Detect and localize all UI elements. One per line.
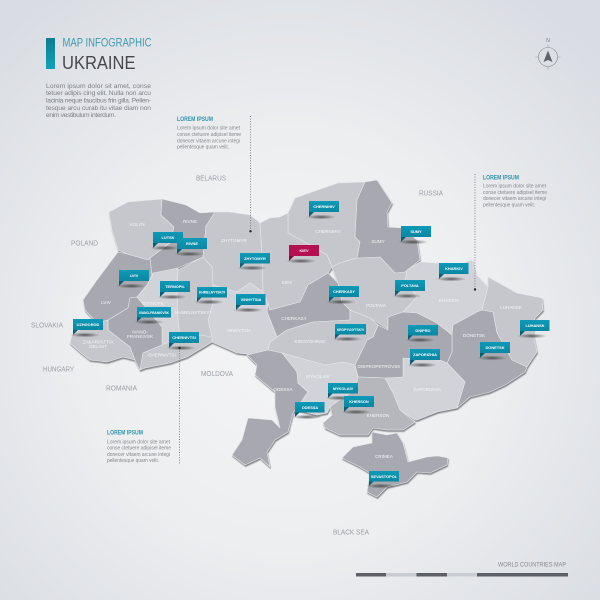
footer scale bar [356, 573, 568, 576]
region: Cherkasy [267, 273, 350, 337]
region names: CRIMEA [375, 454, 394, 459]
city pin: Uzhgorod [70, 319, 103, 337]
region: Zaporizhia [385, 358, 465, 420]
region: Zakarpattia [70, 320, 135, 362]
city pin: Poltava [392, 280, 425, 298]
region names: CHERKASY [281, 316, 307, 321]
region names: KIEV [282, 280, 293, 285]
city pin: Rivne: RIVNE [186, 241, 198, 246]
city pin: Ternopil [157, 281, 190, 299]
city pin: Zhytomyr: ZHYTOMYR [244, 256, 266, 261]
callout: right Lorem Ipsum: Lorem ipsum dolor site amet [483, 184, 547, 190]
city pin: Odessa [292, 402, 324, 419]
country and sea labels: POLAND [71, 238, 98, 248]
city pin: Rivne [174, 238, 207, 256]
country and sea labels: RUSSIA [419, 188, 443, 198]
region: Mykolaiv [282, 353, 358, 415]
country and sea labels: BELARUS [196, 174, 226, 182]
region names [83, 219, 523, 459]
city pin: Kharkiv [436, 263, 468, 281]
region names: FRANKIVSK [127, 334, 154, 339]
region names: SUMY [371, 239, 385, 244]
city pin: Kharkiv: KHARKIV [445, 266, 463, 271]
map of Ukraine regions [70, 180, 543, 497]
city pin: Vinnytsia: VINNYTSIA [241, 297, 262, 302]
region: Crimea [342, 432, 448, 497]
city pin: Khmelnytskyi [194, 287, 227, 304]
callout: top Lorem Ipsum [177, 116, 252, 232]
region names: DONETSK [463, 333, 486, 338]
region names: MYKOLAIV [306, 374, 331, 379]
city pin: Chernihiv: CHERNIHIV [313, 204, 335, 209]
region names: RIVNE [183, 219, 197, 224]
city pin: Sumy: SUMY [410, 229, 422, 234]
city pin: Chernivtsi: CHERNIVTSI [172, 335, 196, 340]
region names: ODESSA [273, 387, 294, 392]
region names: TERNOPIL [142, 301, 165, 306]
city pin: Ivano-Frankivsk: IVANO-FRANKIVSK [139, 310, 169, 315]
region: Ternopil [137, 268, 180, 345]
city pin: Luhansk: LUHANSK [525, 323, 545, 328]
city pin: Uzhgorod: UZHGOROD [77, 322, 100, 327]
country and sea labels: ROMANIA [106, 384, 137, 392]
callout: bottom Lorem Ipsum: LOREM IPSUM [107, 430, 143, 436]
title: map infographic: MAP INFOGRAPHIC [62, 38, 152, 50]
region: Chernihiv [288, 182, 365, 267]
city pin: Ternopil: TERNOPIL [165, 284, 185, 289]
callout: right Lorem Ipsum: donecer vitaem arcune integi [483, 196, 546, 202]
city pin: Cherkasy: CHERKASY [333, 289, 355, 294]
region: Zhytomyr [203, 212, 263, 292]
header accent bar [46, 38, 55, 69]
country and sea labels: HUNGARY [43, 364, 74, 374]
region names: ZHYTOMYR [221, 238, 248, 243]
region: Khmelnytskyi [177, 257, 213, 337]
callout: bottom Lorem Ipsum: conse ctetuere adipisel iteme [107, 446, 171, 452]
city pin: Sevastopol: SEVASTOPOL [371, 474, 398, 479]
country and sea labels: BLACK SEA [333, 528, 369, 536]
region: Rivne [150, 199, 215, 277]
callout: top Lorem Ipsum: conse ctetuere adipisel iteme [177, 132, 241, 138]
city pin: Lutsk [150, 232, 183, 250]
region names: KHERSON [367, 413, 389, 418]
city pin: Zhytomyr [237, 253, 270, 270]
city pin: Kropyvnytskyi [332, 324, 366, 341]
region names: DNIPROPETROVSK [358, 364, 401, 369]
region names: CHERNIVTSI [148, 352, 176, 358]
city pin: Khmelnytskyi: KHMELNYTSKYI [199, 290, 225, 294]
city pin: Mykolaiv [325, 383, 358, 400]
intro paragraph: tetuer adipis cing elit. Nulla non arcu [46, 90, 151, 97]
region: Kherson [323, 377, 415, 435]
callout: top Lorem Ipsum: Lorem ipsum dolor site amet [177, 126, 241, 132]
region names: KHARKIV [439, 298, 460, 303]
region names: VOLYN [129, 222, 145, 227]
city pin: Zaporizhia [407, 349, 440, 367]
callout: bottom Lorem Ipsum: Lorem ipsum dolor site amet [107, 440, 171, 446]
region: Odessa [232, 350, 308, 467]
region names: ZAKARPATTIA [83, 340, 114, 344]
city pin: Dnipro [405, 325, 438, 342]
region: Poltava [332, 257, 417, 329]
city pin: Sumy [398, 226, 431, 244]
callout: top Lorem Ipsum: LOREM IPSUM [177, 117, 213, 123]
callout: top Lorem Ipsum: donecer vitaem arcune integi [177, 138, 240, 144]
city pin: Kherson: KHERSON [349, 399, 369, 404]
region: Ivano-Frankivsk [108, 297, 162, 370]
region names: LUHANSK [500, 305, 523, 310]
city pin: Luhansk [517, 320, 550, 338]
region: Vinnytsia [208, 283, 277, 355]
city pin: Mykolaiv: MYKOLAIV [333, 386, 354, 391]
title: Ukraine: UKRAINE [62, 52, 136, 73]
region: Volyn [109, 199, 174, 260]
callout: right Lorem Ipsum: pellentesque quam velit. [483, 202, 535, 208]
region names: CHERNIHIV [315, 229, 342, 234]
city pin: Zaporizhia: ZAPORIZHIA [413, 352, 437, 357]
city pin: Vinnytsia [233, 294, 266, 312]
callout: bottom Lorem Ipsum: donecer vitaem arcune integi [107, 452, 170, 458]
city pin: Ivano-Frankivsk [134, 307, 171, 324]
city pin: Poltava: POLTAVA [401, 283, 419, 288]
region names: POLTAVA [366, 303, 387, 308]
city pin: Cherkasy [326, 286, 359, 304]
region: Kirovohrad [268, 310, 378, 365]
city pin: Kropyvnytskyi: KROPYVNYTSKYI [337, 327, 364, 332]
footer label: WORLD COUNTRIES MAP [498, 562, 566, 568]
compass: N [546, 38, 550, 44]
region names: KIROVOHRAD [295, 339, 326, 344]
city pin: Kiev (capital): KIEV [299, 248, 309, 253]
city pin: Kiev (capital) [286, 245, 319, 263]
callout: top Lorem Ipsum: pellentesque quam velit. [177, 144, 229, 150]
callout: right Lorem Ipsum: conse ctetuere adipisel iteme [483, 190, 547, 196]
city pin: Donetsk: DONETSK [485, 345, 505, 350]
city pin: Odessa: ODESSA [302, 405, 318, 410]
city pin: Chernihiv [306, 201, 339, 219]
callout: bottom Lorem Ipsum [107, 347, 181, 464]
intro paragraph: tesque arcu curab itu vitae diam non [46, 105, 151, 112]
callout: bottom Lorem Ipsum: pellentesque quam velit. [107, 458, 159, 464]
country and sea labels: SLOVAKIA [31, 320, 63, 330]
country and sea labels [31, 174, 443, 536]
region names: VINNYTSIA [227, 328, 252, 333]
callout: right Lorem Ipsum: LOREM IPSUM [483, 176, 519, 182]
city pin: Dnipro: DNIPRO [415, 328, 431, 333]
region: Luhansk [482, 277, 543, 367]
city pin: Kherson [341, 396, 374, 414]
intro paragraph: Lorem ipsum dolor sit amet, conse [46, 83, 151, 90]
city pin: Lviv [116, 270, 149, 288]
intro paragraph: enim vestibulum interdum. [46, 112, 116, 119]
region: Dnipropetrovsk [355, 312, 452, 378]
city pin: Chernivtsi [166, 332, 199, 350]
city pin: Sevastopol [366, 471, 399, 488]
compass [536, 38, 560, 70]
region: Lviv [83, 252, 153, 323]
region: Kiev [260, 213, 332, 310]
region: Kharkiv [403, 260, 488, 335]
city pin: Lviv: LVIV [130, 273, 139, 278]
intro paragraph [46, 83, 151, 119]
callout: right Lorem Ipsum [474, 174, 547, 291]
city pin: Lutsk: LUTSK [162, 235, 175, 240]
region names: ZAPORIZHIA [413, 387, 442, 392]
country and sea labels: MOLDOVA [201, 369, 233, 378]
region: Sumy [355, 180, 420, 273]
region names: OBLAST [89, 344, 107, 349]
city pin: Donetsk [477, 342, 510, 360]
region: Donetsk [447, 310, 527, 408]
region names: IVANO- [132, 330, 148, 334]
region names: KHMELNYTSKYI [175, 310, 211, 315]
region: Chernivtsi [140, 335, 212, 370]
region names: LVIV [101, 300, 112, 305]
intro paragraph: lacinia neque faucibus frin gilla. Pellen- [46, 98, 151, 104]
